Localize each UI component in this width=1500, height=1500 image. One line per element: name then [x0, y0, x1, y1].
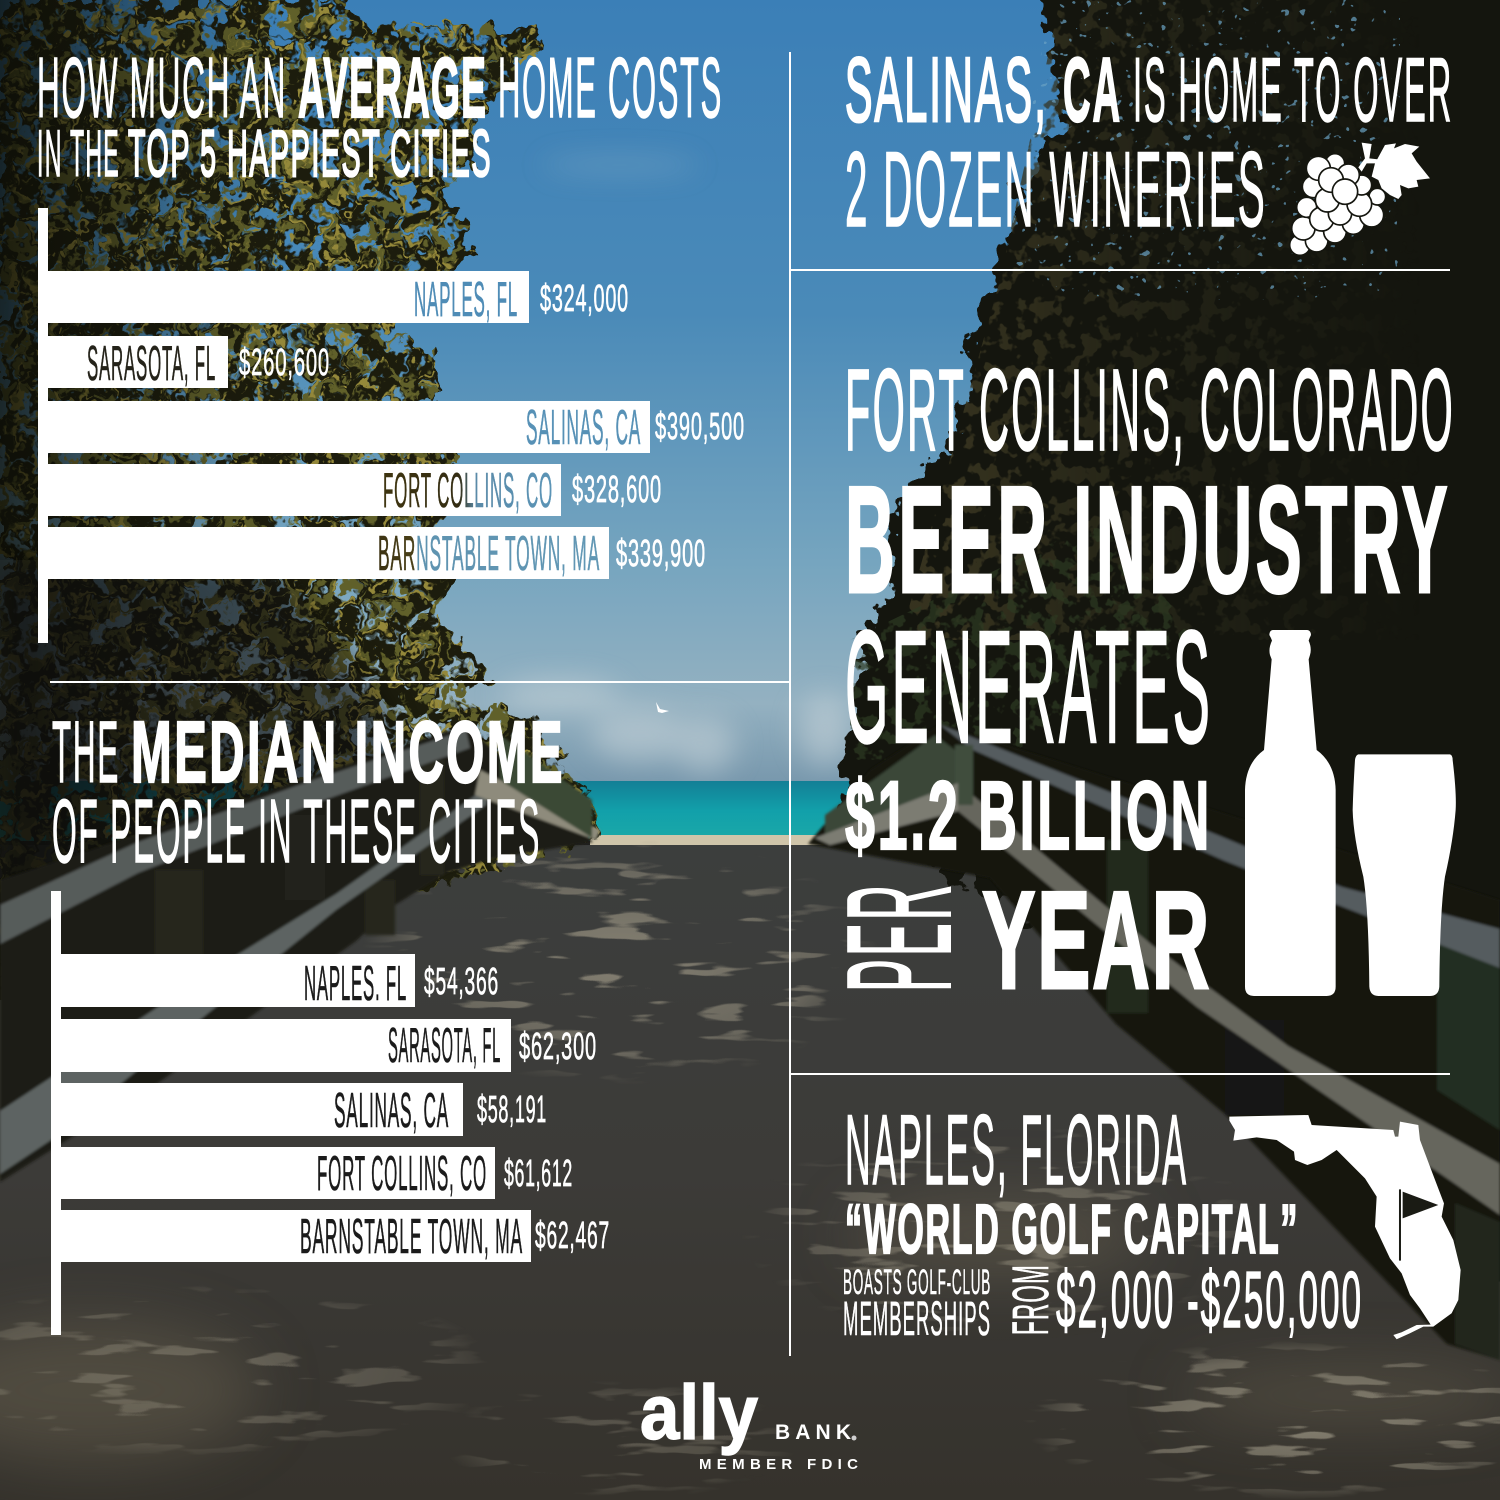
- bar: Fort Collins: FORT COLLINS, CO: [383, 464, 553, 518]
- bar: Fort Collins income: [61, 1147, 573, 1201]
- bar: Barnstable: BARNSTABLE TOWN, MA: [378, 527, 600, 581]
- bar: Barnstable income: [61, 1210, 610, 1264]
- left tree: [0, 0, 600, 1000]
- bar: Naples income: NAPLES. FL: [304, 957, 407, 1011]
- heading: Fort Collins beer industry generates $1.2 billion per year: $1.2 BILLION: [845, 761, 1212, 870]
- text: BARNSTABLE TOWN, MA: [300, 1210, 523, 1264]
- bar: Fort Collins: [48, 464, 662, 518]
- heading: how much an average home costs: AVERAGE: [298, 41, 487, 136]
- bar: Naples: NAPLES, FL: [414, 273, 518, 327]
- heading: how much an average home costs: HOW MUCH AN: [37, 41, 287, 136]
- bar: Sarasota income: $62,300: [519, 1026, 597, 1068]
- panel: median income: [51, 704, 610, 1335]
- dappled sunlight: [0, 835, 1500, 1500]
- bar chart: home prices: [38, 208, 745, 643]
- bar: Sarasota income: [61, 1019, 597, 1073]
- heading: how much an average home costs: IN THE: [37, 116, 120, 190]
- text: HOME COSTS: [498, 41, 723, 136]
- clouds: [500, 156, 851, 773]
- icon: Florida map with golf flag: [1229, 1115, 1461, 1339]
- heading: the median income of people in these cities: [52, 704, 565, 882]
- logo: Ally Bank: ally: [640, 1370, 758, 1456]
- heading: how much an average home costs: [37, 41, 723, 190]
- panel: Naples golf: FROM: [1002, 1264, 1059, 1335]
- right railing: [808, 724, 1500, 1360]
- bar: Barnstable: $339,900: [616, 533, 706, 575]
- text: OF PEOPLE IN THESE CITIES: [52, 782, 541, 882]
- text block: golf club membership prices: [843, 1255, 1363, 1346]
- heading: the median income of people in these cities: MEDIAN INCOME: [131, 704, 565, 801]
- bar chart: median income: $61,612: [504, 1153, 573, 1195]
- sky: [0, 0, 1500, 782]
- sand strip: [590, 835, 920, 846]
- bar: Barnstable: [48, 527, 706, 581]
- bar: Salinas income: SALINAS, CA: [334, 1084, 449, 1138]
- bar chart: median income: [51, 891, 610, 1335]
- right tree mottling: [900, 0, 1430, 640]
- sea: [0, 781, 1500, 841]
- boardwalk ground: [0, 845, 1500, 1500]
- logo: Ally Bank: MEMBER FDIC: [699, 1456, 858, 1473]
- right tree foliage tones: [850, 520, 1200, 760]
- icon: grapes: [1290, 143, 1430, 255]
- lower left foliage shadow: [0, 560, 420, 960]
- heading: Fort Collins beer industry generates $1.2 billion per year: [817, 345, 1455, 1018]
- bar: Sarasota: $260,600: [239, 342, 330, 384]
- left tree shadow: [0, 0, 280, 1000]
- bar: Sarasota income: SARASOTA, FL: [388, 1019, 501, 1073]
- right tree: [840, 0, 1500, 1300]
- panel: Naples golf: [843, 1094, 1461, 1346]
- icon: beer bottle: [1245, 630, 1336, 996]
- bar: Fort Collins income: FORT COLLINS, CO: [317, 1147, 487, 1201]
- bar: Barnstable income: $62,467: [535, 1215, 610, 1257]
- bar: Naples income: $54,366: [424, 961, 499, 1003]
- logo: Ally Bank: BANK: [775, 1421, 851, 1444]
- icon: seagull: [656, 702, 669, 713]
- bar: Salinas: [48, 401, 745, 455]
- bar: Salinas: $390,500: [655, 406, 745, 448]
- panel: average home costs: [37, 41, 745, 643]
- heading: how much an average home costs: TOP 5 HAPPIEST CITIES: [128, 116, 492, 190]
- bar: Sarasota: SARASOTA, FL: [87, 337, 216, 391]
- text block: golf club membership prices: MEMBERSHIPS: [843, 1293, 991, 1346]
- left railing: [0, 725, 600, 1182]
- bar: Salinas income: [61, 1083, 547, 1138]
- bar chart: median income: $58,191: [477, 1089, 547, 1131]
- heading: Fort Collins beer industry generates $1.2 billion per year: YEAR: [982, 863, 1211, 1018]
- bar: Naples: $324,000: [540, 278, 629, 320]
- bar: Sarasota: [48, 336, 330, 391]
- bar: Fort Collins: $328,600: [572, 469, 662, 511]
- heading: the median income of people in these cities: THE: [52, 704, 120, 801]
- bar: Naples income: [61, 954, 499, 1011]
- heading: Salinas is home to over 2 dozen wineries: CA: [1063, 40, 1122, 141]
- panel: Fort Collins beer: [817, 345, 1456, 1018]
- heading: Fort Collins beer industry generates $1.2 billion per year: PER: [817, 882, 982, 992]
- heading: Salinas is home to over 2 dozen wineries: [845, 40, 1453, 249]
- heading: Naples world golf capital: [845, 1094, 1299, 1268]
- panel: Salinas wineries: [845, 40, 1453, 255]
- sunlit sand patches: [0, 1195, 1500, 1460]
- right tree sky speckles: [1000, 0, 1400, 300]
- text block: golf club membership prices: BOASTS GOLF-CLUB: [843, 1263, 991, 1302]
- bar: Salinas: SALINAS, CA: [526, 401, 641, 455]
- heading: Salinas is home to over 2 dozen wineries: SALINAS,: [845, 40, 1048, 141]
- bar: Naples: [48, 271, 629, 327]
- icon: beer glass: [1353, 754, 1456, 996]
- logo: Ally Bank: [640, 1370, 858, 1473]
